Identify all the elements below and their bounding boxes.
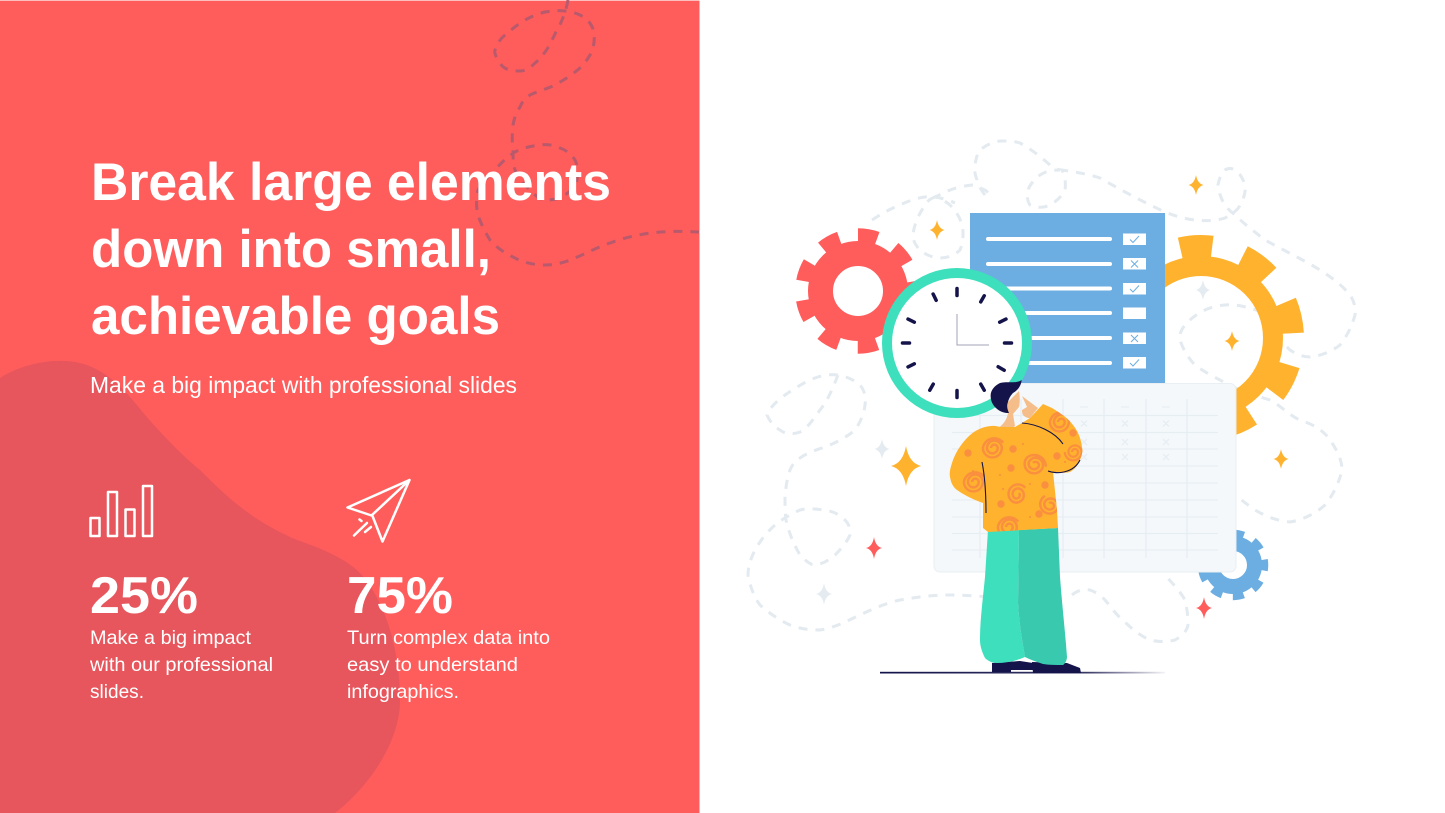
stat: 25% <box>89 567 273 703</box>
illustration dashed paths <box>748 141 1355 642</box>
check and cross marks <box>1130 236 1139 366</box>
icon: bar chart <box>90 486 152 536</box>
icon: paper plane <box>348 480 410 542</box>
stat text: left <box>89 627 273 703</box>
stat text: right: Turn complex data into <box>347 627 550 649</box>
stat text: left: slides. <box>90 681 144 703</box>
stat text: left: with our professional <box>89 654 273 676</box>
gear: red <box>802 236 914 346</box>
stat: 75%: 75% <box>347 567 453 625</box>
heading: Break large elements <box>91 153 611 212</box>
heading: achievable goals <box>91 287 500 346</box>
panel: red background <box>0 1 700 813</box>
person: sweater pattern <box>964 412 1082 536</box>
person: trousers <box>980 530 1025 663</box>
heading <box>91 153 611 346</box>
clock ticks <box>902 288 1012 398</box>
person: hand <box>1022 396 1038 418</box>
person: sweater creases <box>982 423 1080 513</box>
person: neck and face <box>998 391 1020 432</box>
stat text: right: easy to understand <box>347 654 518 676</box>
table grid <box>952 399 1218 558</box>
ground line <box>880 672 1165 674</box>
person: trousers shade <box>1018 528 1067 665</box>
checklist lines <box>986 237 1112 365</box>
person: shoes <box>992 661 1081 673</box>
clock hands <box>957 314 989 345</box>
checklist document <box>970 213 1165 383</box>
stat: 75% <box>347 567 550 703</box>
checklist boxes <box>1123 234 1146 368</box>
gear: blue <box>1202 534 1264 596</box>
clock <box>887 273 1027 413</box>
heading: down into small, <box>91 220 491 279</box>
gear: yellow <box>1091 228 1311 448</box>
stat text: right: infographics. <box>347 681 459 703</box>
dashed path on red panel <box>476 0 699 265</box>
person: hair <box>991 380 1022 413</box>
stat text: left: Make a big impact <box>90 627 252 649</box>
stat: 25%: 25% <box>90 567 198 625</box>
sparkles <box>816 175 1288 619</box>
person <box>950 380 1082 673</box>
data table panel <box>934 384 1236 572</box>
person: sweater <box>950 404 1082 532</box>
blob: darker shape <box>0 361 400 813</box>
stat text: right <box>347 627 550 703</box>
subtitle: Make a big impact with professional slides <box>90 372 517 398</box>
